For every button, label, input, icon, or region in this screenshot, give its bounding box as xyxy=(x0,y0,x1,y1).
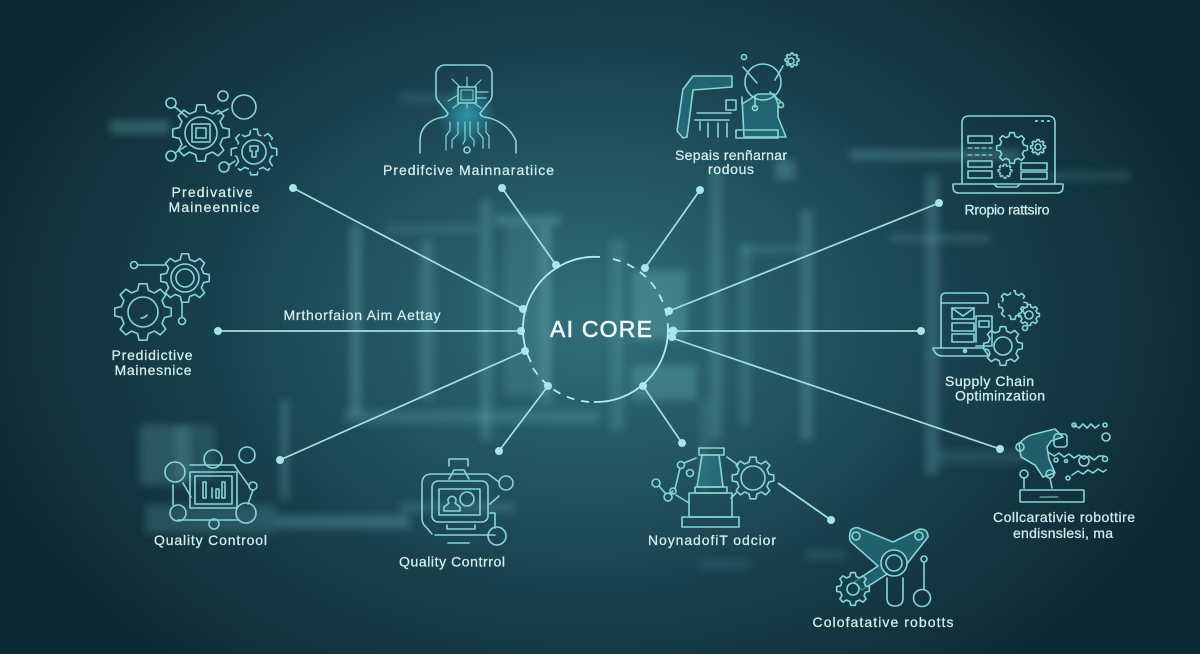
label: collaborative robotire: endisnslesi, ma xyxy=(1013,525,1113,541)
line: bottom right spoke xyxy=(643,386,682,443)
label: predictive maintenance 3 xyxy=(112,347,193,378)
label: predictive maintenance 3: Mainesnice xyxy=(114,362,192,378)
line: short spoke xyxy=(778,483,831,520)
label: sepais rennarnar rodous: Sepais renñarnar xyxy=(675,147,787,163)
line: right spoke xyxy=(673,330,921,332)
icon: camera quality control xyxy=(422,459,513,545)
line: bottom spoke xyxy=(499,386,548,451)
label: sepais rennarnar rodous xyxy=(675,147,787,177)
icon: tablet and gears xyxy=(933,291,1039,365)
label: colaborative robots: Colofatative robotts xyxy=(812,614,954,630)
connector lines xyxy=(218,188,1000,520)
icon: robot machine xyxy=(677,53,799,138)
label: predictive maintenance 1: Predivative xyxy=(172,184,253,200)
icon: gears, left xyxy=(115,254,209,340)
line: top spoke xyxy=(502,188,556,265)
label: predictive maintenance 1 xyxy=(168,184,260,215)
line: top right spoke xyxy=(645,190,700,268)
label: sepais rennarnar rodous: rodous xyxy=(708,161,754,177)
label: predictive maintenance 3: Predidictive xyxy=(112,347,193,363)
heading: AI CORE: AI CORE xyxy=(550,316,652,342)
label: rropio rattsiro: Rropio rattsiro xyxy=(964,202,1050,218)
connector nodes xyxy=(214,184,1004,524)
AI core circle xyxy=(523,257,668,402)
label: supply chain optimization: Optiminzation xyxy=(955,388,1045,404)
label: supply chain optimization: Supply Chain xyxy=(945,373,1034,389)
icon: collaborative robot joints xyxy=(837,528,930,606)
icon: laptop with gears xyxy=(953,116,1063,193)
icon: gears with chip, top left xyxy=(166,91,277,175)
line: upper right spoke xyxy=(669,203,939,311)
label: predictive maintenance 1: Maineennice xyxy=(168,199,260,215)
line: left spoke xyxy=(218,330,521,332)
line: lower left spoke xyxy=(280,351,525,460)
label: collaborative robotire xyxy=(993,509,1135,541)
icon: robot arm with wires xyxy=(1016,423,1110,502)
line: top left spoke xyxy=(293,188,523,309)
icon: machine tower with gears xyxy=(652,448,774,527)
label: mrthorfaion aim aettay: Mrthorfaion Aim Aettay xyxy=(284,307,440,323)
label: predictive maintenance 2: Predifcive Mainnaratiice xyxy=(383,162,554,178)
label: quality control 2: Quality Contrrol xyxy=(399,554,505,570)
icon: head with circuit xyxy=(420,65,516,153)
label: collaborative robotire: Collcarativie robottire xyxy=(993,509,1135,525)
label: quality control 1: Quality Controol xyxy=(154,532,267,548)
label: supply chain optimization xyxy=(945,373,1045,404)
label: noynadofil odcior: NoynadofiT odcior xyxy=(648,532,776,548)
icon: quality control board xyxy=(165,447,257,529)
line: lower right spoke xyxy=(672,338,1000,449)
